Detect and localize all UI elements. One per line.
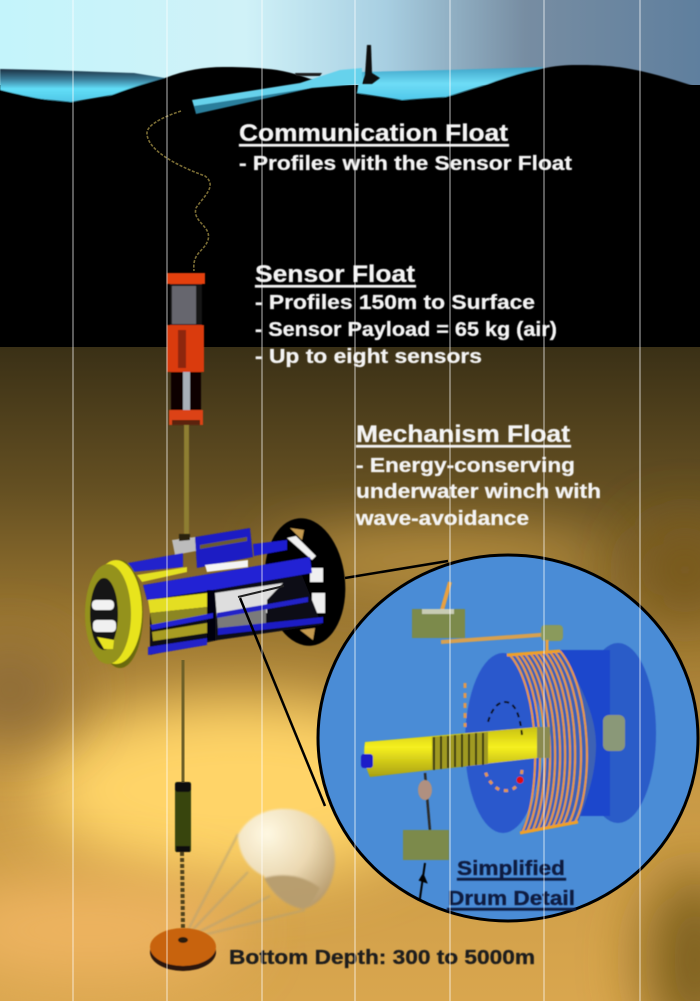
communication float <box>192 45 380 114</box>
simplified drum detail label <box>447 858 576 910</box>
back drum <box>560 643 656 823</box>
shaft cable wraps <box>432 732 488 770</box>
mechanism float label <box>355 421 601 530</box>
back ring <box>259 514 351 650</box>
lower cable and pulley <box>418 773 432 831</box>
simplified drum detail label: Simplified <box>457 858 565 880</box>
mechanism float label: wave-avoidance <box>355 508 529 530</box>
sensor float label: - Sensor Payload = 65 kg (air) <box>255 319 557 341</box>
bottom depth label: Bottom Depth: 300 to 5000m <box>229 947 535 969</box>
communication tether <box>147 111 210 271</box>
leader line to drum detail <box>240 598 325 806</box>
mechanism float <box>85 514 351 668</box>
lower rods <box>150 613 213 630</box>
anchor weight <box>150 928 216 971</box>
leader line to ring <box>345 561 448 578</box>
parachute <box>183 809 335 940</box>
upper rod <box>128 553 183 572</box>
end bolt <box>603 715 625 751</box>
sea water <box>0 85 700 348</box>
white drum <box>215 583 283 618</box>
drum front face <box>465 653 541 833</box>
sensor float label <box>255 261 557 368</box>
dark core <box>150 570 322 655</box>
sensor float <box>167 273 205 546</box>
simplified drum detail label: Drum Detail <box>448 888 575 910</box>
mast <box>362 45 380 84</box>
communication float label <box>239 120 572 175</box>
ocean surface waves <box>0 65 700 110</box>
orbit dashes <box>488 702 522 735</box>
winch shaft <box>364 727 537 777</box>
level wind arm <box>441 625 563 652</box>
sensor float label: Sensor Float <box>255 261 415 288</box>
yellow end disc <box>85 560 143 668</box>
upper motor box <box>412 582 465 638</box>
drum detail circle <box>318 555 698 921</box>
lower mooring line <box>182 660 184 782</box>
main rod <box>143 557 312 600</box>
arrow cable <box>418 863 426 912</box>
yellow body <box>148 593 207 613</box>
ocean floor background <box>0 347 700 1001</box>
lower motor box <box>403 830 449 860</box>
weight tube and chain <box>175 782 191 930</box>
sensor float label: - Up to eight sensors <box>255 346 482 368</box>
mechanism float label: underwater winch with <box>356 481 601 503</box>
mechanism float label: - Energy-conserving <box>356 455 575 477</box>
top frame <box>172 537 196 555</box>
cable coil <box>507 651 596 833</box>
sensor float label: - Profiles 150m to Surface <box>255 292 535 314</box>
communication float label: - Profiles with the Sensor Float <box>239 153 572 175</box>
shaft end cap <box>361 754 373 768</box>
communication float label: Communication Float <box>239 120 508 147</box>
sky <box>0 0 700 110</box>
mechanism float label: Mechanism Float <box>356 421 570 448</box>
